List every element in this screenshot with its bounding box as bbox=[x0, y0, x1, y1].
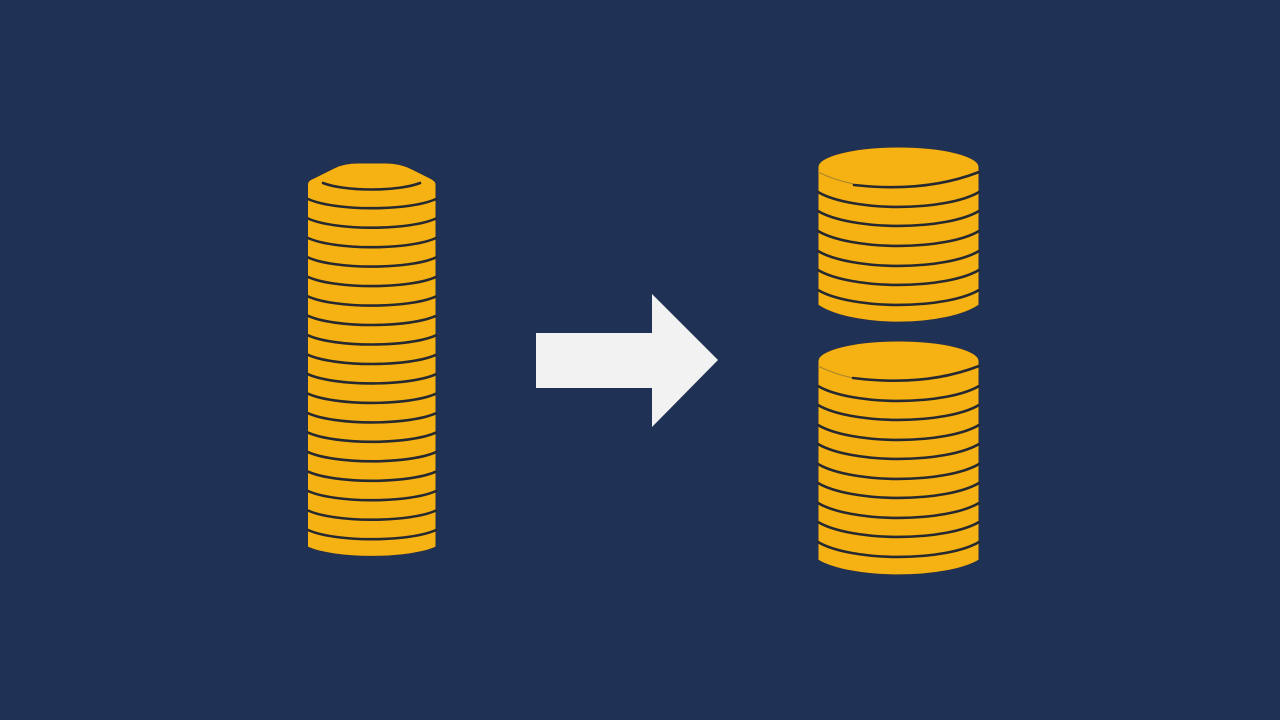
icon: lower right coin stack bbox=[818, 341, 979, 575]
icon: upper right coin stack bbox=[818, 147, 979, 322]
icon: tall coin stack bbox=[308, 163, 436, 556]
arrow: pointing right bbox=[536, 294, 718, 427]
